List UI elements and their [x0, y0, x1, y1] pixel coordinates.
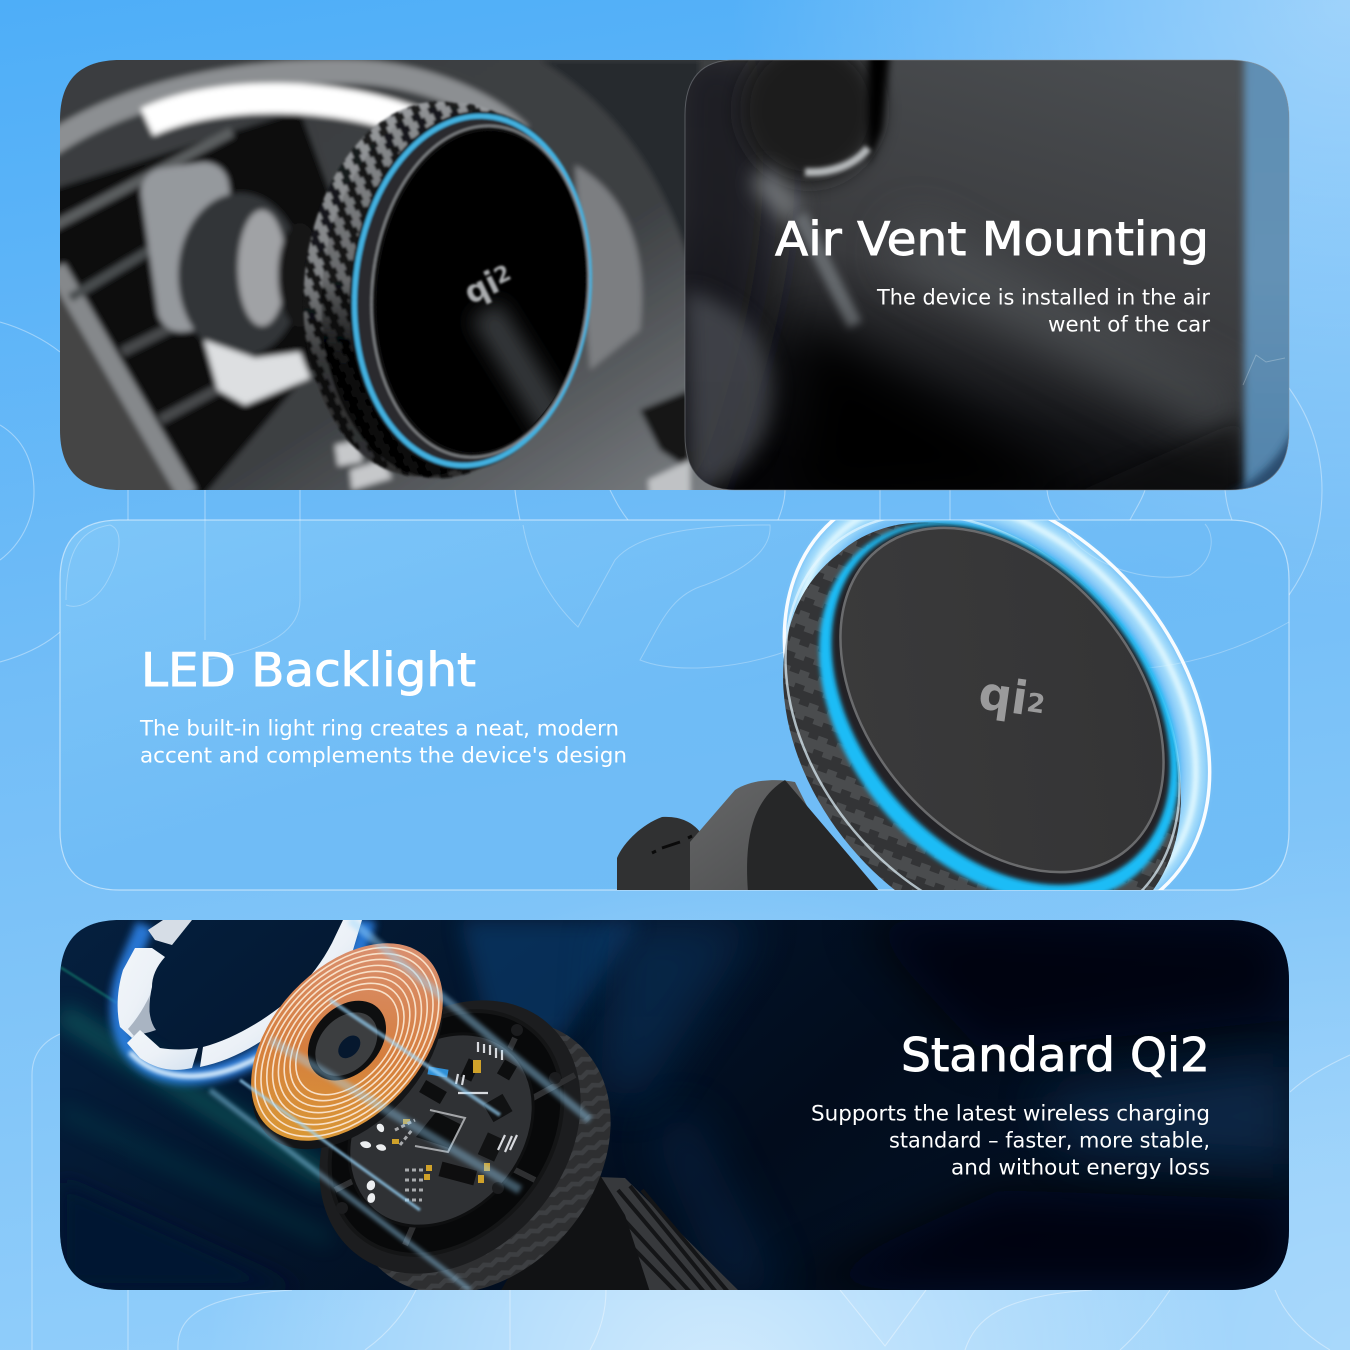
exploded charger: [104, 920, 738, 1290]
light beams: [210, 920, 590, 1290]
text: air vent description: The device is installed in the air: [876, 286, 1210, 310]
ring connector tab: [283, 994, 315, 1025]
text: qi2 description: [811, 1102, 1210, 1180]
decorative outlines: [0, 322, 1350, 1350]
text: air vent description: went of the car: [1048, 312, 1210, 336]
qi2 logo: qi: [458, 263, 505, 312]
qi2 logo: qi: [975, 665, 1031, 726]
text: led description: accent and complements the device's design: [140, 744, 627, 768]
text: led description: [139, 716, 627, 768]
text: led description: The built-in light ring creates a neat, modern: [139, 716, 619, 740]
mount arm: [617, 780, 880, 892]
blue led ring: [816, 520, 1182, 890]
charger with glowing ring: [617, 520, 1212, 890]
text: air vent description: [876, 286, 1210, 336]
qi2 logo: 2: [1025, 688, 1047, 720]
panel: air vent mounting: [60, 60, 1290, 490]
car vent photo: [60, 60, 730, 490]
circuit board components: [360, 1042, 517, 1203]
disc highlight: [485, 310, 565, 440]
handle: [500, 1175, 740, 1292]
base housing: [320, 1000, 580, 1274]
text: qi2 description: and without energy loss: [951, 1156, 1210, 1180]
light rays background: [60, 920, 1289, 1290]
text: qi2 description: Supports the latest wireless charging: [811, 1102, 1210, 1126]
panel: standard qi2: [60, 920, 1289, 1290]
heading: standard qi2: Standard Qi2: [901, 1028, 1210, 1082]
qi2 logo: 2: [490, 261, 515, 290]
carbon body: [378, 1028, 611, 1290]
glow rings: [782, 520, 1212, 890]
panel: led backlight: [59, 519, 1290, 891]
copper coil: [251, 943, 443, 1150]
carbon body: [783, 520, 1181, 890]
magnet ring: [118, 920, 367, 1076]
magnetic charger disc: [302, 100, 594, 480]
heading: led backlight: LED Backlight: [141, 643, 476, 697]
text: qi2 description: standard – faster, more stable,: [889, 1128, 1210, 1152]
frosted glass card: [685, 60, 1289, 490]
heading: air vent mounting: Air Vent Mounting: [775, 212, 1209, 266]
